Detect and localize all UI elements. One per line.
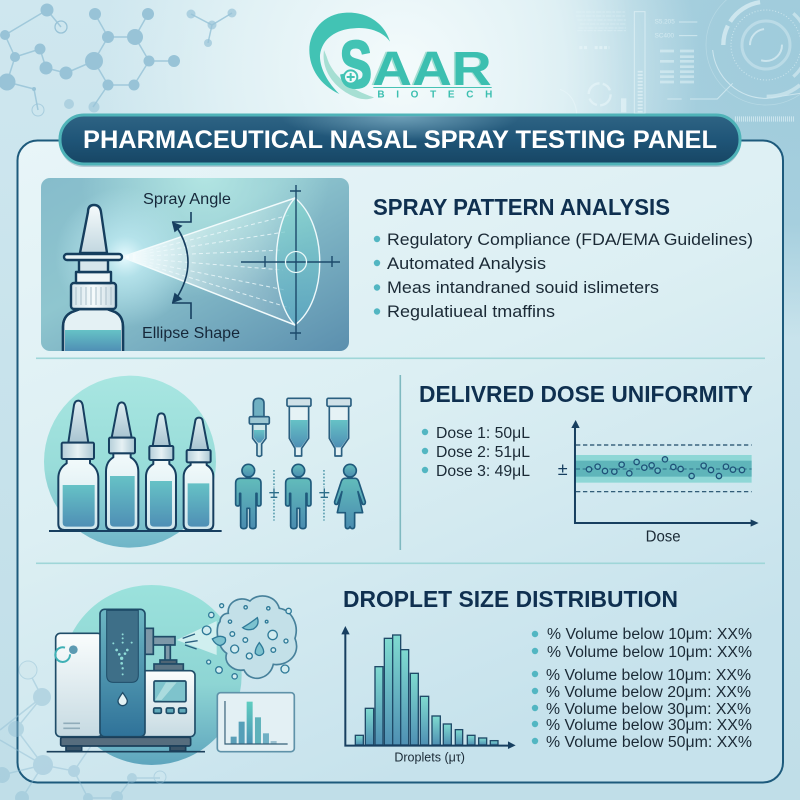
- mini histogram card: [217, 693, 294, 752]
- axis symbol: plus-minus: ±: [558, 459, 568, 479]
- spray cone: [122, 198, 298, 325]
- background circle: [44, 376, 216, 548]
- instrument spray nozzle: [145, 628, 183, 671]
- list: dose values: Dose 3: 49μL: [436, 463, 530, 480]
- list: droplet volume percentages: % Volume below 30μm: XX%: [546, 701, 751, 718]
- list: droplet volume percentages: % Volume below 10μm: XX%: [547, 644, 752, 661]
- list: droplet volume percentages: % Volume below 10μm: XX%: [546, 667, 751, 684]
- list: spray pattern bullets: Meas intandraned souid islimeters: [387, 278, 659, 297]
- list: droplet volume percentages: % Volume below 20μm: XX%: [546, 684, 751, 701]
- list: droplet volume percentages: % Volume below 50μm: XX%: [546, 734, 752, 751]
- axis label: droplets: Droplets (μτ): [394, 751, 465, 765]
- chart: droplet size histogram: [341, 626, 516, 765]
- logo AAR shadow: AAR: [370, 42, 490, 96]
- spray plume: [177, 621, 217, 655]
- icon: person two: [286, 464, 311, 529]
- list: droplet volume percentages: % Volume below 10μm: XX%: [547, 626, 752, 643]
- logo swoosh: [309, 13, 390, 99]
- logo AAR letters: AAR: [372, 42, 492, 96]
- molecule decoration: bottom left: [0, 661, 166, 800]
- illustration: bottles and subjects: [44, 376, 365, 548]
- data points: [586, 457, 745, 479]
- instrument base: [47, 737, 205, 752]
- icon: dropper: [249, 398, 269, 456]
- heading: spray pattern analysis: SPRAY PATTERN ANALYSIS: [373, 194, 670, 220]
- logo S letter: S: [340, 28, 372, 102]
- list: dose values: Dose 1: 50μL: [436, 425, 530, 442]
- molecule decoration: top left: [0, 4, 236, 116]
- list: droplet volume percentages: [532, 626, 752, 751]
- icon: person one: [236, 464, 261, 529]
- icon: four spray bottles: [58, 401, 213, 530]
- logo: Saar Biotech: [309, 13, 492, 102]
- instrument right housing: [140, 671, 195, 737]
- list: spray pattern bullets: Automated Analysis: [387, 254, 546, 273]
- axis label: dose: Dose: [646, 529, 681, 546]
- title: PHARMACEUTICAL NASAL SPRAY TESTING PANEL: [83, 126, 717, 154]
- label: spray angle: Spray Angle: [143, 191, 231, 208]
- icon: vial two: [327, 398, 351, 456]
- HUD decoration: top right: [560, 0, 800, 119]
- logo BIOTECH: BIOTECH: [377, 89, 492, 100]
- heading: delivered dose uniformity: DELIVRED DOSE UNIFORMITY: [419, 381, 753, 407]
- label: ellipse shape: Ellipse Shape: [142, 325, 240, 342]
- panel: spray pattern illustration: [41, 178, 349, 351]
- ellipse target: [241, 185, 340, 340]
- icon: person three: [335, 464, 365, 529]
- logo plus badge: [344, 70, 357, 84]
- icon: nasal spray bottle: [63, 205, 123, 351]
- background circle: [62, 585, 242, 765]
- icon: plus-minus separators: [269, 470, 329, 521]
- illustration: droplet analyzer instrument: [47, 585, 297, 765]
- list: droplet volume percentages: % Volume below 30μm: XX%: [546, 717, 752, 734]
- list: dose values: [422, 425, 530, 480]
- chart: dose uniformity control chart: [558, 420, 759, 546]
- HUD decoration: top right: SC400: [655, 33, 674, 40]
- droplet cloud: [202, 596, 297, 679]
- list: dose values: Dose 2: 51μL: [436, 444, 530, 461]
- list: spray pattern bullets: Regulatory Compliance (FDA/EMA Guidelines): [387, 230, 753, 249]
- list: spray pattern bullets: Regulatiueal tmaffins: [387, 302, 555, 321]
- angle arc with arrows: [172, 212, 191, 319]
- instrument left housing: [55, 633, 102, 737]
- title banner: [60, 115, 740, 167]
- icon: vial one: [287, 398, 311, 456]
- logo rule: [373, 86, 492, 89]
- heading: droplet size distribution: DROPLET SIZE DISTRIBUTION: [343, 586, 678, 612]
- main panel: [18, 140, 783, 782]
- instrument center column: [100, 609, 145, 737]
- HUD decoration: top right: S5.205: [655, 18, 675, 25]
- list: spray pattern bullets: [374, 230, 753, 321]
